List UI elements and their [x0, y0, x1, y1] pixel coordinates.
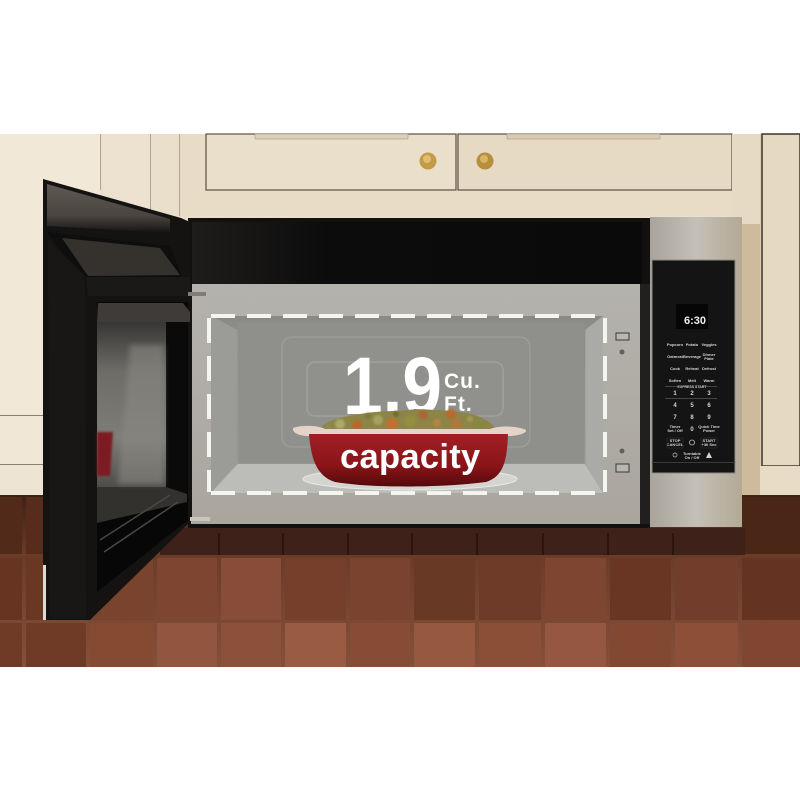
red casserole dish with food: [293, 409, 526, 486]
open microwave door: [43, 179, 210, 620]
cavity door latches: [616, 333, 629, 472]
control panel buttons: Potato: [686, 342, 699, 347]
label: Cu. Ft.: Cu.: [444, 370, 481, 393]
control panel buttons: 9: [707, 415, 711, 421]
control panel buttons: 3: [707, 391, 711, 397]
control panel buttons: Timer: [670, 424, 681, 429]
control panel buttons: Power: [703, 428, 715, 433]
control panel buttons: +30 Sec: [701, 442, 717, 447]
control panel buttons: 0: [690, 427, 694, 433]
label: capacity: capacity: [340, 438, 480, 476]
control panel buttons: On / Off: [685, 455, 700, 460]
control panel buttons: START: [702, 438, 716, 443]
control panel buttons: 8: [690, 415, 694, 421]
dashed capacity outline: [209, 316, 605, 493]
control panel buttons: Set / Off: [667, 428, 683, 433]
control panel buttons: [665, 342, 721, 460]
tile backsplash: [0, 495, 800, 667]
upper wall cabinets: [0, 134, 800, 496]
microwave cavity: [211, 316, 603, 493]
control panel buttons: 7: [673, 415, 677, 421]
digital clock display: [676, 304, 708, 329]
control panel buttons: EXPRESS START: [678, 385, 707, 389]
control panel buttons: Oatmeal: [667, 354, 683, 359]
control panel buttons: 4: [673, 403, 677, 409]
control panel buttons: 2: [690, 391, 694, 397]
control panel buttons: Quick Time: [698, 424, 721, 429]
control panel buttons: Beverage: [683, 354, 702, 359]
microwave body: [188, 218, 650, 528]
control panel buttons: Popcorn: [667, 342, 684, 347]
control panel buttons: 1: [673, 391, 677, 397]
control panel buttons: Soften: [669, 378, 682, 383]
control panel buttons: 5: [690, 403, 694, 409]
control panel buttons: STOP: [670, 438, 681, 443]
control panel housing: [650, 217, 742, 527]
control panel buttons: 6: [707, 403, 711, 409]
icon: brass cabinet knobs: [420, 152, 494, 170]
large numeral: 1.9: 1.9: [343, 341, 442, 432]
control panel buttons: Veggies: [701, 342, 717, 347]
control panel buttons: Reheat: [685, 366, 699, 371]
control panel buttons: Plate: [704, 356, 715, 361]
control panel buttons: CANCEL: [667, 442, 684, 447]
control panel buttons: Melt: [688, 378, 697, 383]
control panel buttons: Cook: [670, 366, 681, 371]
digital clock display: 6:30: [684, 315, 706, 327]
control panel buttons: Dinner: [703, 352, 716, 357]
control panel buttons: Warm: [704, 378, 715, 383]
label: Cu. Ft.: Ft.: [444, 393, 473, 416]
label: Cu. Ft.: [444, 370, 481, 416]
control panel buttons: Turntable: [683, 451, 702, 456]
control panel buttons: Defrost: [702, 366, 717, 371]
